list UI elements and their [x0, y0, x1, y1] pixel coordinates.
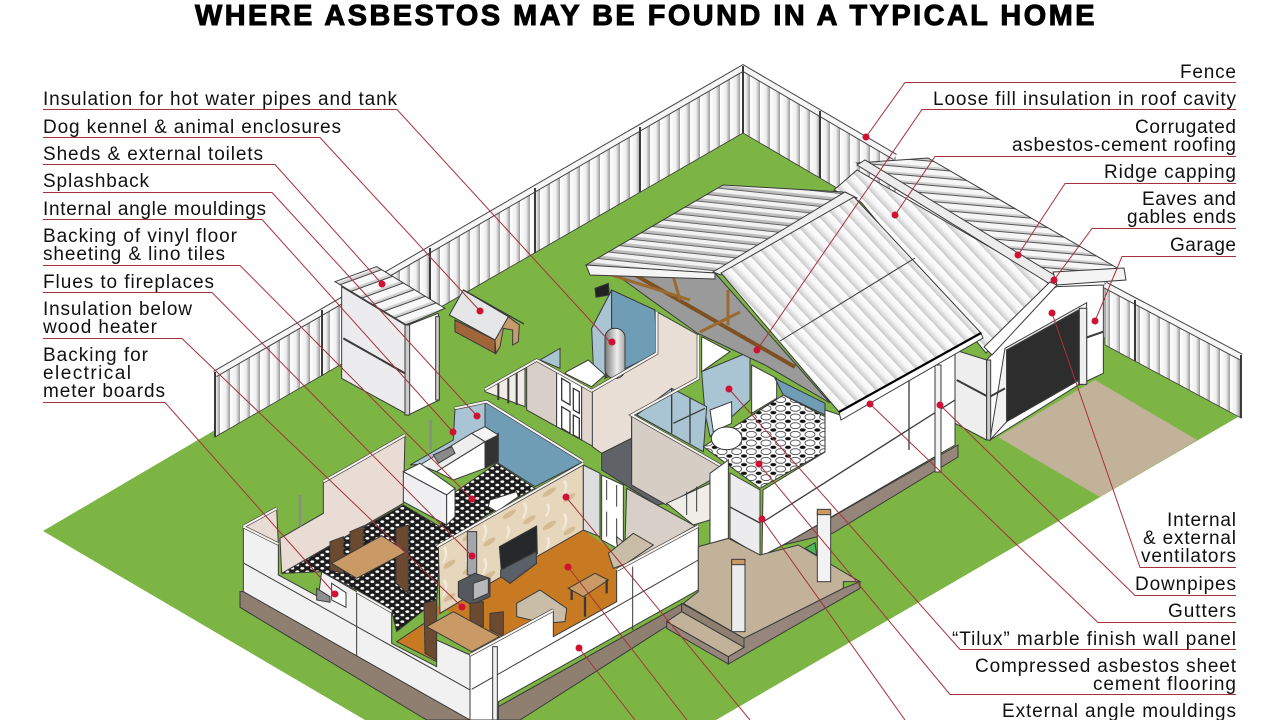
label: dog kennel and animal enclosures: Dog kennel & animal enclosures: [43, 117, 341, 138]
driveway: [998, 380, 1197, 497]
front rooms: [240, 402, 710, 720]
label: downpipes: [936, 402, 1236, 596]
label: backing of vinyl floor sheeting and lino tiles: Backing of vinyl floor: [43, 226, 238, 247]
right room wall: [617, 488, 695, 570]
label: internal angle mouldings: Internal angle mouldings: [43, 199, 266, 220]
foundations: [240, 592, 470, 720]
label: internal and external ventilators: Internal: [1167, 510, 1236, 531]
label: eaves and gables ends: Eaves and: [1142, 189, 1236, 210]
lawn: [43, 128, 1238, 720]
label: insulation for hot water pipes and tank: Insulation for hot water pipes and tank: [43, 89, 398, 110]
label: backing for electrical meter boards: meter boards: [43, 381, 165, 402]
label: eaves and gables ends: [1050, 189, 1236, 284]
label: splashback: Splashback: [43, 171, 150, 192]
label: compressed asbestos sheet cement flooring: Compressed asbestos sheet: [975, 656, 1237, 677]
back rooms: [485, 283, 825, 505]
label: corrugated asbestos-cement roofing: Corrugated: [1135, 117, 1236, 138]
label: backing for electrical meter boards: electrical: [43, 363, 131, 384]
label: eaves and gables ends: gables ends: [1127, 207, 1236, 228]
label: ridge capping: [1014, 162, 1236, 258]
porch: [667, 460, 860, 664]
label: insulation below wood heater: Insulation below: [43, 299, 192, 320]
leader: living room floor: [564, 564, 687, 720]
coffee table: [568, 573, 608, 597]
label: tilux marble finish wall panel: “Tilux” marble finish wall panel: [952, 629, 1236, 650]
label: compressed asbestos sheet cement flooring: cement flooring: [1093, 674, 1236, 695]
label: sheds and external toilets: [43, 144, 386, 288]
label: internal and external ventilators: & external: [1143, 528, 1236, 549]
label: corrugated asbestos-cement roofing: [892, 117, 1236, 218]
label: sheds and external toilets: Sheds & external toilets: [43, 144, 263, 165]
label: fence: Fence: [1180, 62, 1236, 83]
right outer wall: [470, 526, 698, 720]
label: dog kennel and animal enclosures: [43, 117, 484, 314]
label: backing of vinyl floor sheeting and lino tiles: sheeting & lino tiles: [43, 244, 225, 265]
left outer wall: [243, 527, 470, 720]
label: gutters: Gutters: [1168, 601, 1236, 622]
label: gutters: [866, 400, 1236, 622]
garage: [955, 285, 1103, 440]
main house side wall: [730, 345, 958, 556]
wood heater: [467, 532, 477, 575]
label: garage: [1092, 235, 1236, 324]
label: fence: [862, 62, 1236, 140]
label: corrugated asbestos-cement roofing: asbestos-cement roofing: [1012, 135, 1236, 156]
label: external angle mouldings: [758, 516, 1236, 720]
wall top caps: [243, 402, 698, 655]
roof and trusses: [586, 158, 1126, 420]
label: flues to fireplaces: [43, 272, 476, 560]
label: downpipes: Downpipes: [1135, 574, 1236, 595]
label: backing for electrical meter boards: Backing for: [43, 345, 149, 366]
dining tables: [332, 536, 407, 578]
label: flues to fireplaces: Flues to fireplaces: [43, 272, 214, 293]
kitchen walls: [485, 402, 583, 487]
label: internal and external ventilators: [1048, 310, 1236, 568]
label: splashback: [43, 171, 480, 420]
label: compressed asbestos sheet cement flooring: [756, 460, 1237, 695]
label: tilux marble finish wall panel: [726, 386, 1236, 650]
label: loose fill insulation in roof cavity: [754, 89, 1236, 354]
label: ridge capping: Ridge capping: [1104, 162, 1236, 183]
fence: [215, 66, 1241, 437]
tv: [499, 526, 537, 575]
leader: wallpaper panel: [562, 494, 750, 720]
label: insulation below wood heater: wood heater: [42, 317, 158, 338]
label: backing of vinyl floor sheeting and lino tiles: [43, 226, 476, 502]
dog kennel: [449, 290, 524, 353]
wallpaper wall: [438, 465, 583, 613]
shed: [335, 267, 445, 415]
title: WHERE ASBESTOS MAY BE FOUND IN A TYPICAL HOME: [195, 0, 1097, 32]
label: internal and external ventilators: ventilators: [1141, 546, 1236, 567]
sofa and armchair: [517, 590, 567, 623]
label: loose fill insulation in roof cavity: Loose fill insulation in roof cavity: [933, 89, 1236, 110]
label: backing for electrical meter boards: [43, 345, 338, 598]
kitchen cabinets: [420, 433, 485, 472]
label: garage: Garage: [1170, 235, 1236, 256]
downpipe: [493, 647, 497, 720]
leader: outer wall: [576, 644, 635, 720]
meter board: [332, 583, 346, 607]
label: insulation for hot water pipes and tank: [43, 89, 616, 346]
dining chairs: [330, 537, 343, 573]
label: internal angle mouldings: [43, 199, 456, 436]
label: insulation below wood heater: [42, 299, 466, 610]
